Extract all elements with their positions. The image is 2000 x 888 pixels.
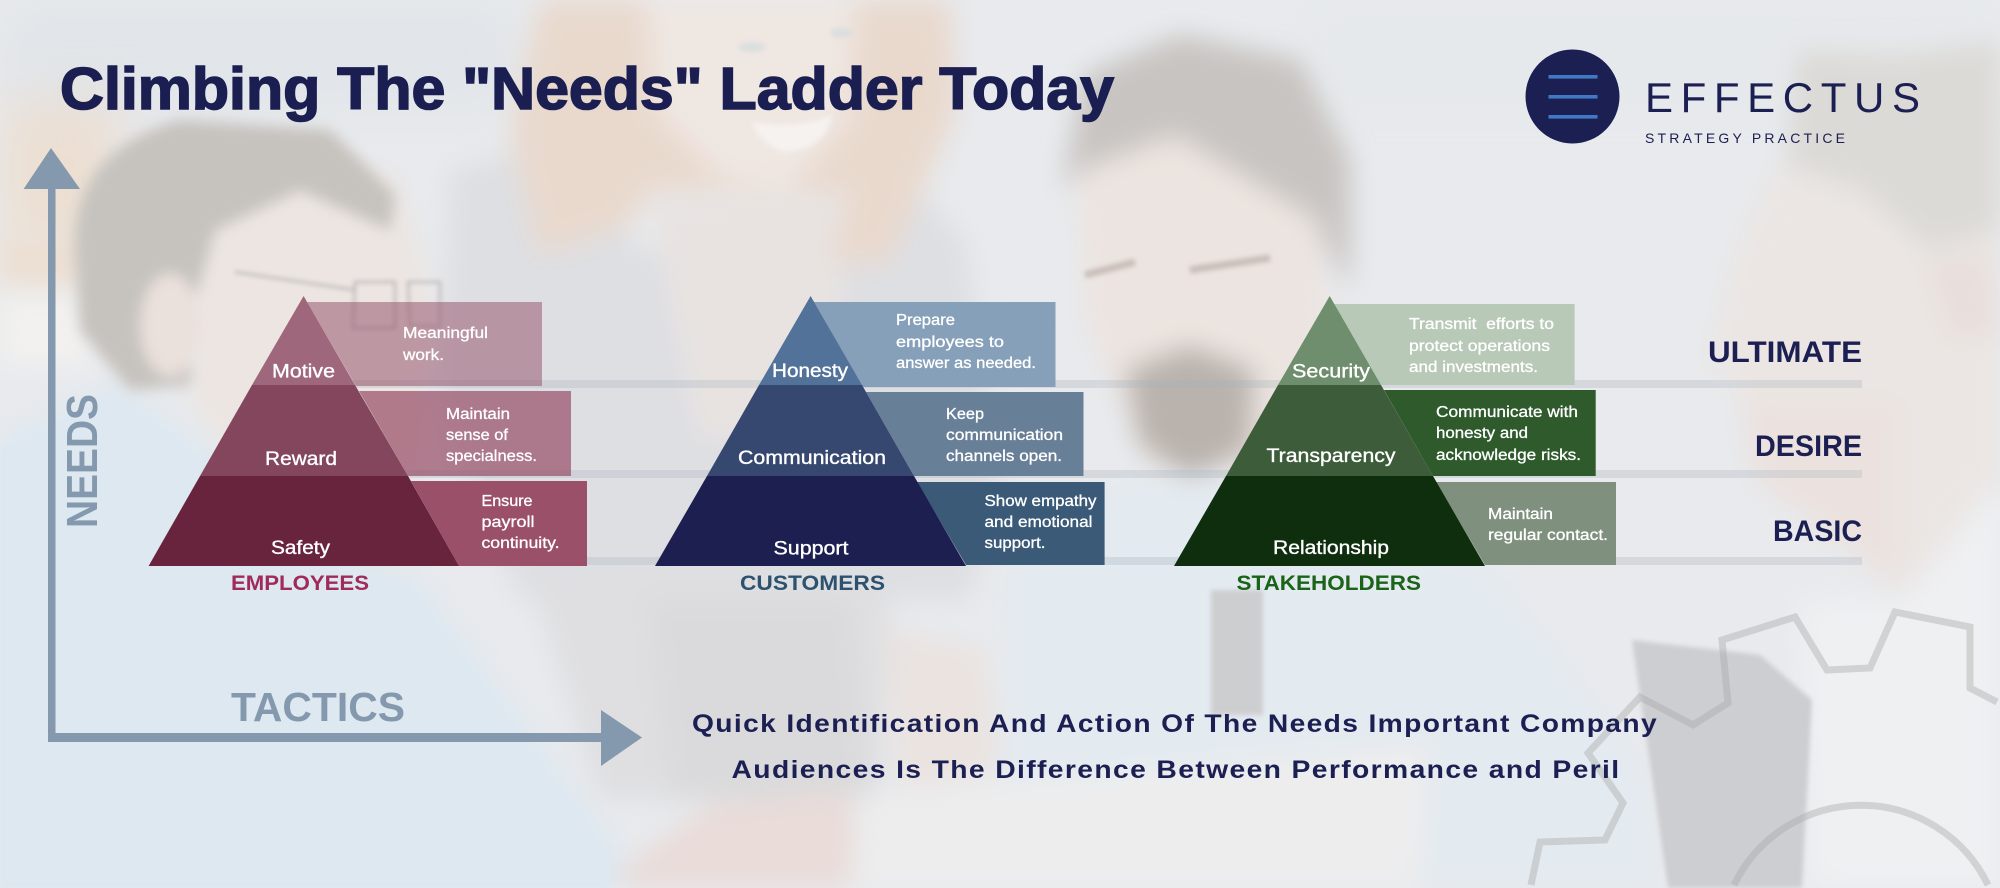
- pyramid tiers: customers: Support: [774, 538, 849, 560]
- level label: basic: BASIC: [1773, 515, 1862, 548]
- horizontal level guide lines: [319, 380, 1862, 565]
- left man face: [190, 167, 430, 570]
- right man ear: [1925, 255, 2000, 340]
- tactic boxes: employees: Ensure: [482, 493, 532, 510]
- tactic boxes: employees: [307, 302, 587, 566]
- tactic boxes: customers: channels open.: [946, 448, 1062, 465]
- category label: stakeholders: STAKEHOLDERS: [1236, 572, 1421, 595]
- tactic boxes: stakeholders: Maintain: [1488, 506, 1553, 523]
- tactic boxes: stakeholders: honesty and: [1436, 425, 1528, 442]
- woman hand and left man's hand: [620, 790, 860, 888]
- laptop: [850, 745, 1430, 888]
- tactic boxes: stakeholders: and investments.: [1409, 359, 1538, 376]
- woman blouse: [440, 140, 1000, 600]
- right man hair: [1785, 40, 2000, 250]
- logo wordmark: EFFECTUS: [1645, 74, 1920, 121]
- title: Climbing The "Needs" Ladder Today: [60, 56, 1114, 122]
- background gear outline: [1531, 612, 1997, 885]
- pyramid tiers: stakeholders: Security: [1292, 362, 1371, 382]
- arrow: tactics axis (horizontal): [48, 710, 642, 766]
- woman face: [645, 0, 855, 188]
- center man face: [1080, 135, 1330, 470]
- pyramid tiers: employees: Motive: [272, 362, 335, 382]
- closing statement: Quick Identification And Action Of The Needs Important Company: [692, 710, 1658, 738]
- closing statement: Audiences Is The Difference Between Performance and Peril: [732, 756, 1620, 784]
- level label: ultimate: ULTIMATE: [1708, 336, 1862, 369]
- closing statement: [692, 710, 1658, 784]
- tactic boxes: employees: Maintain: [446, 406, 510, 423]
- pyramid tiers: stakeholders: [1174, 296, 1485, 566]
- tactic boxes: customers: answer as needed.: [896, 355, 1036, 372]
- eyeglasses: [235, 272, 440, 328]
- tactic boxes: employees: work.: [402, 347, 444, 364]
- tactic boxes: stakeholders: [1334, 304, 1616, 565]
- pyramid tiers: employees: Reward: [265, 449, 337, 470]
- tie: [1211, 590, 1263, 715]
- tactic boxes: customers: [814, 302, 1105, 565]
- right man skin: [1708, 167, 2000, 594]
- center man shirt: [1000, 480, 1660, 888]
- logo tagline: STRATEGY PRACTICE: [1645, 130, 1845, 146]
- tactic boxes: employees: continuity.: [482, 535, 560, 552]
- tactic boxes: stakeholders: protect operations: [1409, 338, 1550, 355]
- panel: employees pyramid: [149, 296, 587, 595]
- pyramid tiers: customers: Communication: [738, 448, 886, 469]
- tactic boxes: stakeholders: acknowledge risks.: [1436, 447, 1581, 464]
- tactic boxes: employees: Meaningful: [403, 325, 488, 342]
- tactic boxes: employees: sense of: [446, 427, 509, 444]
- left man shirt: [0, 387, 630, 888]
- pyramid tiers: employees: [149, 296, 459, 566]
- logo icon: [1526, 50, 1620, 144]
- tactic boxes: customers: Keep: [946, 406, 984, 423]
- panel: stakeholders pyramid: [1174, 296, 1616, 595]
- woman lower body: [530, 560, 890, 800]
- category label: employees: EMPLOYEES: [231, 572, 369, 595]
- axis label: needs: NEEDS: [58, 394, 107, 528]
- tactic boxes: employees: specialness.: [446, 448, 537, 465]
- right man shirt: [1800, 480, 2000, 888]
- pyramid tiers: employees: Safety: [271, 538, 331, 559]
- level label: desire: DESIRE: [1755, 430, 1862, 463]
- woman hair: [510, 0, 957, 262]
- shirt colour carried to the photo edge: [0, 445, 16, 888]
- tactic boxes: stakeholders: Transmit efforts to: [1409, 316, 1554, 333]
- tactic boxes: customers: Prepare: [896, 312, 955, 329]
- tactic boxes: customers: and emotional: [984, 514, 1092, 531]
- arrow: needs axis (vertical): [24, 148, 80, 742]
- tactic boxes: customers: communication: [946, 427, 1063, 444]
- center man hair: [1062, 35, 1350, 290]
- tactic boxes: stakeholders: Communicate with: [1436, 404, 1578, 421]
- category label: customers: CUSTOMERS: [740, 572, 885, 595]
- center man beard: [1125, 345, 1255, 478]
- tactic boxes: employees: payroll: [482, 514, 534, 531]
- pyramid tiers: customers: [655, 296, 966, 566]
- tactic boxes: customers: Show empathy: [984, 493, 1097, 510]
- pyramid tiers: stakeholders: Transparency: [1266, 446, 1396, 467]
- pyramid tiers: customers: Honesty: [772, 361, 849, 382]
- tactic boxes: customers: support.: [984, 535, 1046, 552]
- pyramid tiers: stakeholders: Relationship: [1273, 538, 1389, 559]
- dark chair: [1632, 640, 1812, 888]
- tactic boxes: customers: employees to: [896, 334, 1004, 351]
- tactic boxes: stakeholders: regular contact.: [1488, 527, 1608, 544]
- panel: customers pyramid: [655, 296, 1105, 595]
- axis label: tactics: TACTICS: [231, 684, 405, 730]
- logo: Effectus Strategy Practice: [1526, 50, 1920, 146]
